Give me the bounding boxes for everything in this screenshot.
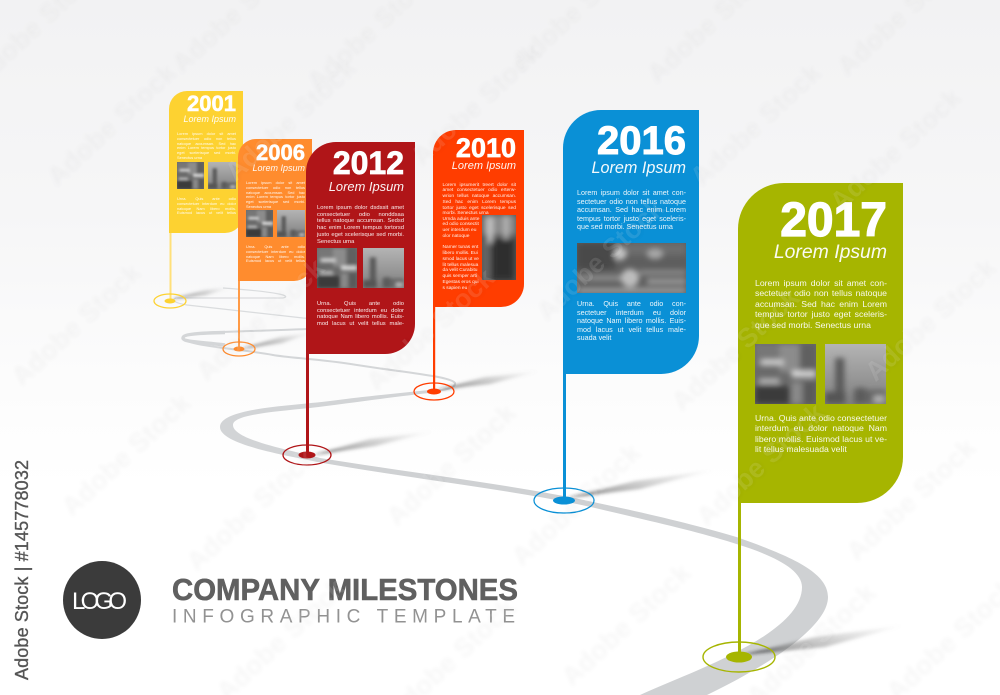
body text narrow second: lit tellus malesua — [442, 263, 478, 268]
text: Adobe Stock — [684, 57, 825, 192]
text: Adobe Stock — [664, 282, 805, 417]
body text top: tortor justo eget scelerisque sed — [442, 206, 516, 211]
body text bottom: Urna. Quis ante odio con- — [577, 299, 686, 308]
text: Adobe Stock — [379, 397, 520, 532]
body text narrow second: libero mollis. Eui — [442, 251, 478, 256]
marker: 2012 pole and ring — [283, 353, 331, 465]
text: Adobe Stock — [824, 82, 965, 217]
body text bottom: natoque Nam libero mollis. — [246, 254, 305, 259]
photo — [317, 248, 357, 288]
body text bottom: Urna. Quis ante odio — [246, 244, 305, 249]
logo circle: LOGO — [72, 588, 127, 615]
photo — [755, 344, 816, 404]
subtitle: INFOGRAPHIC TEMPLATE — [172, 606, 515, 628]
body text bottom: sectetuer interdum eu dolor — [577, 308, 686, 317]
body text top: sectetuer odio non tellus natoque — [755, 288, 887, 298]
body text bottom: natoque Nam libero mollis. Euis- — [317, 314, 404, 320]
body text bottom: Urna. Quis ante odio consectetuer — [755, 413, 887, 423]
body text bottom: Urna. Quis ante odio — [317, 301, 404, 307]
body text top: eget scelerisque sed morbi. — [246, 199, 305, 204]
body text bottom: mod lacus ut velit tellus male- — [577, 325, 686, 334]
text: Adobe Stock — [689, 397, 830, 532]
year 2017: 2017 — [780, 194, 887, 247]
body text bottom: interdum eu dolor natoque Nam — [755, 423, 887, 433]
text: Adobe Stock — [404, 37, 545, 172]
title: COMPANY MILESTONES — [172, 572, 518, 607]
body text top: natoque accumsan. Sed hac — [177, 141, 236, 146]
body text top: Lorem ipsumerit treert dolor sit — [442, 183, 516, 188]
body text narrow second — [442, 245, 479, 291]
body text top: hac enim Lorem tempus tortorsd — [317, 225, 404, 231]
flag: 2012 — [306, 142, 415, 354]
text: Adobe Stock — [179, 442, 320, 577]
body text top: wrion tellus natoque accumsan. — [442, 194, 516, 199]
shadows cast by the flag poles — [172, 287, 905, 655]
body text top: Lorem ipsum dolor sit amet con- — [755, 278, 887, 288]
body text top: enim Lorem tempus tortor justo — [246, 194, 305, 199]
body text top: Senectus urna — [317, 239, 354, 245]
body text bottom: Euismod lacus ut velit tellus — [177, 210, 236, 215]
road: winding timeline path — [173, 288, 828, 695]
flag: 2016 — [563, 110, 699, 374]
body text top — [177, 131, 236, 160]
text: Adobe Stock — [529, 192, 670, 327]
body text top: accumsan. Sed hac enim Lorem — [755, 299, 887, 309]
body text narrow first: Urnda aduis ante — [442, 217, 479, 222]
photo — [482, 215, 516, 280]
body text top: Lorem ipsum dolor dsdssit amet — [317, 205, 404, 211]
body text top: Lorem ipsum dolor sit amet — [246, 180, 305, 185]
subtitle: Lorem Ipsum — [329, 179, 404, 194]
body text bottom — [317, 301, 404, 327]
photo — [246, 210, 273, 237]
body text top: consectetuer odio nonddsaa — [317, 212, 404, 218]
text: Adobe Stock — [859, 252, 1000, 387]
body text top: enim Lorem tempus tortor justo — [177, 145, 236, 150]
body text narrow second: Egestas eros qui — [442, 280, 479, 285]
stock id side text: Adobe Stock | #145778032 — [12, 460, 32, 680]
body text top: eget scelerisque sed morbi. — [177, 150, 236, 155]
body text bottom: libero mollis. Euismod lacus ut ve- — [755, 434, 887, 444]
body text top: morbi. Senectus urna — [442, 211, 489, 216]
photo — [177, 162, 204, 189]
text: Adobe Stock — [504, 437, 645, 572]
body text top: consectetuer odio non tellus — [246, 185, 305, 190]
body text narrow first — [442, 216, 480, 239]
flag: 2006 — [238, 139, 312, 281]
photo — [577, 243, 686, 293]
body text bottom — [755, 413, 887, 454]
text: Adobe Stock — [839, 432, 980, 567]
body text top: tempus tortor justo eget sceleris- — [577, 214, 686, 223]
body text narrow second: smod lacus ut ve — [442, 257, 479, 262]
marker: 2010 pole and ring — [414, 306, 454, 400]
text: Adobe Stock — [54, 387, 195, 522]
body text top — [577, 188, 686, 231]
body text top: Lorem ipsum dolor sit amet con- — [577, 188, 686, 197]
body text bottom: natoque Nam libero mollis. Euis- — [577, 316, 686, 325]
flag: 2001 — [169, 91, 243, 233]
body text top: Lorem ipsum dolor sit amet — [177, 131, 236, 136]
body text narrow first: olor natoque — [442, 234, 469, 239]
text: Adobe Stock — [359, 262, 500, 397]
body text bottom: Urna. Quis ante odio — [177, 196, 236, 201]
text: Adobe Stock — [39, 57, 180, 192]
year 2001: 2001 — [187, 91, 236, 116]
body text top: Senectus urna — [177, 155, 202, 160]
body text bottom: consectetuer interdum eu dolor — [177, 201, 236, 206]
photo — [825, 344, 886, 404]
body text bottom: consectetuer interdum eu dolor — [317, 308, 404, 314]
body text top: tempus tortor justo eget sceleris- — [755, 309, 887, 319]
year 2016: 2016 — [597, 119, 686, 163]
body text top — [316, 205, 404, 245]
photo — [277, 210, 305, 237]
body text narrow first: ed odio consectit — [442, 222, 479, 227]
flag: 2010 — [433, 130, 524, 307]
body text bottom: suada velit — [577, 333, 611, 342]
year 2012: 2012 — [333, 145, 404, 181]
body text bottom: natoque Nam libero mollis. — [177, 206, 236, 211]
text: Adobe Stock — [554, 557, 695, 692]
subtitle: Lorem Ipsum — [774, 241, 887, 263]
flag: 2017 — [738, 183, 903, 503]
subtitle: Lorem Ipsum — [183, 114, 236, 124]
marker: 2006 pole and ring — [223, 280, 255, 356]
marker: 2001 pole and ring — [154, 232, 186, 308]
body text top: que sed morbi. Senectus urna — [755, 320, 871, 330]
subtitle: Lorem Ipsum — [452, 160, 516, 172]
body text top: justo eget scelerisque sed morbi. — [317, 232, 404, 238]
text: Adobe Stock — [4, 257, 145, 392]
marker: 2016 pole and ring — [534, 373, 594, 513]
subtitle: Lorem Ipsum — [592, 159, 686, 177]
body text top: que sed morbi. Senectus urna — [577, 222, 673, 231]
subtitle: Lorem Ipsum — [252, 163, 305, 173]
body text top: natoque accumsan. Sed hac — [246, 190, 305, 195]
body text top: sectetuer odio non tellus natoque — [577, 197, 686, 206]
body text top: amet consectetuer odio erterw- — [442, 188, 516, 193]
text: Adobe Stock — [219, 52, 360, 187]
body text narrow second: da velit Curabitu — [442, 268, 478, 273]
photo — [363, 248, 404, 288]
body text bottom: Euismod lacus ut velit tellus — [246, 258, 305, 263]
text: Adobe Stock — [189, 252, 330, 387]
logo circle — [63, 561, 141, 639]
body text narrow second: quis semper arti — [442, 274, 477, 279]
body text top — [246, 180, 305, 209]
year 2006: 2006 — [256, 140, 305, 165]
body text bottom: consectetuer interdum eu dolor — [246, 249, 305, 254]
marker: 2017 pole and ring — [703, 502, 775, 672]
body text bottom — [577, 299, 686, 342]
photo — [208, 162, 236, 189]
body text top — [442, 182, 516, 216]
body text top — [755, 278, 887, 330]
body text narrow second: Namer tunas ent — [442, 245, 478, 250]
body text top: Sed hac enim Lorem tempus — [442, 200, 516, 205]
year 2010: 2010 — [456, 133, 516, 163]
body text bottom: lit tellus malesuada velit — [755, 444, 847, 454]
body text bottom: mod lacus ut velit tellus male- — [317, 321, 404, 327]
body text top: tellus natoque accumsan. Sedsd — [317, 218, 404, 224]
body text narrow first: uer interdum eu — [442, 228, 476, 233]
body text top: consectetuer odio non tellus — [177, 136, 236, 141]
body text bottom — [246, 244, 305, 263]
body text narrow second: s sapien eu — [442, 286, 467, 291]
body text bottom — [177, 196, 236, 215]
body text top: Senectus urna — [246, 204, 271, 209]
body text top: accumsan. Sed hac enim Lorem — [577, 205, 686, 214]
